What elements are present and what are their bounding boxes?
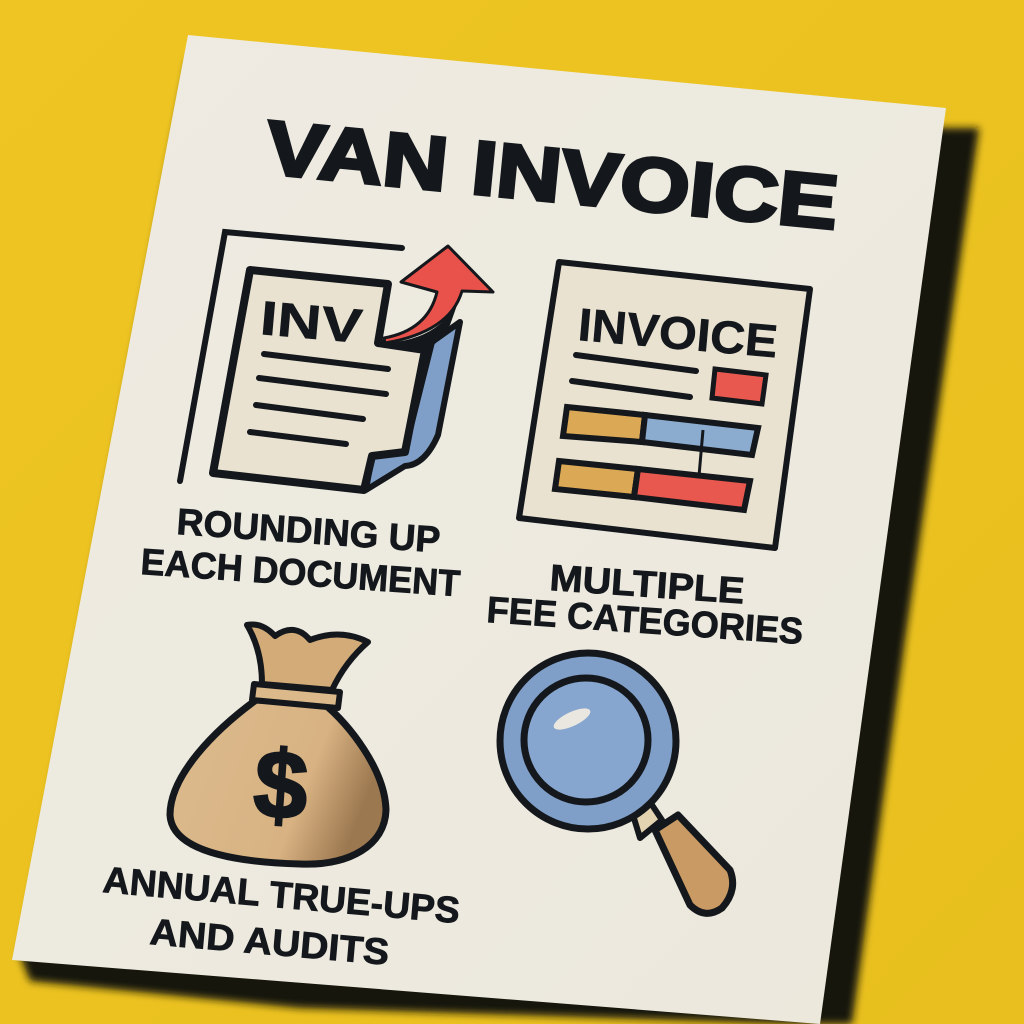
- text lines: [250, 354, 388, 444]
- glare: [551, 704, 593, 734]
- caption: fee categories: MULTIPLE: [548, 557, 746, 612]
- bag neck: [252, 684, 340, 708]
- caption: annual true-ups: AND AUDITS: [148, 911, 391, 973]
- front page: [213, 270, 425, 490]
- page: [519, 262, 810, 548]
- caption: rounding up: [139, 501, 462, 604]
- caption: annual true-ups: [101, 859, 462, 973]
- fee row 2: [555, 461, 638, 497]
- icon: invoice with fee categories: [519, 262, 810, 548]
- outer lens: [500, 653, 676, 829]
- caption: annual true-ups: ANNUAL TRUE-UPS: [101, 859, 462, 931]
- bag body: [170, 700, 386, 864]
- red arrow: [384, 246, 493, 343]
- caption: fee categories: FEE CATEGORIES: [485, 589, 805, 652]
- icon: money bag: [170, 624, 386, 864]
- heading: INVOICE: [576, 298, 780, 367]
- title: VAN INVOICE: [262, 105, 842, 246]
- row tick: [699, 430, 703, 476]
- icon: magnifying glass: [500, 653, 733, 913]
- red tag: [712, 369, 766, 404]
- bag top: [247, 624, 368, 690]
- fee row 1: [563, 407, 645, 442]
- dollar sign: $: [251, 730, 311, 841]
- blue fold: [366, 322, 460, 490]
- caption: fee categories: [485, 557, 805, 652]
- arrow shadow: [384, 291, 462, 350]
- caption: rounding up: ROUNDING UP: [175, 501, 442, 560]
- icon: invoice with arrow: [180, 232, 493, 490]
- handle: [655, 815, 733, 913]
- back page: [180, 232, 402, 481]
- inner lens: [524, 678, 648, 802]
- page label: INV: [258, 292, 364, 354]
- caption: rounding up: EACH DOCUMENT: [139, 541, 462, 604]
- lines: [572, 355, 696, 397]
